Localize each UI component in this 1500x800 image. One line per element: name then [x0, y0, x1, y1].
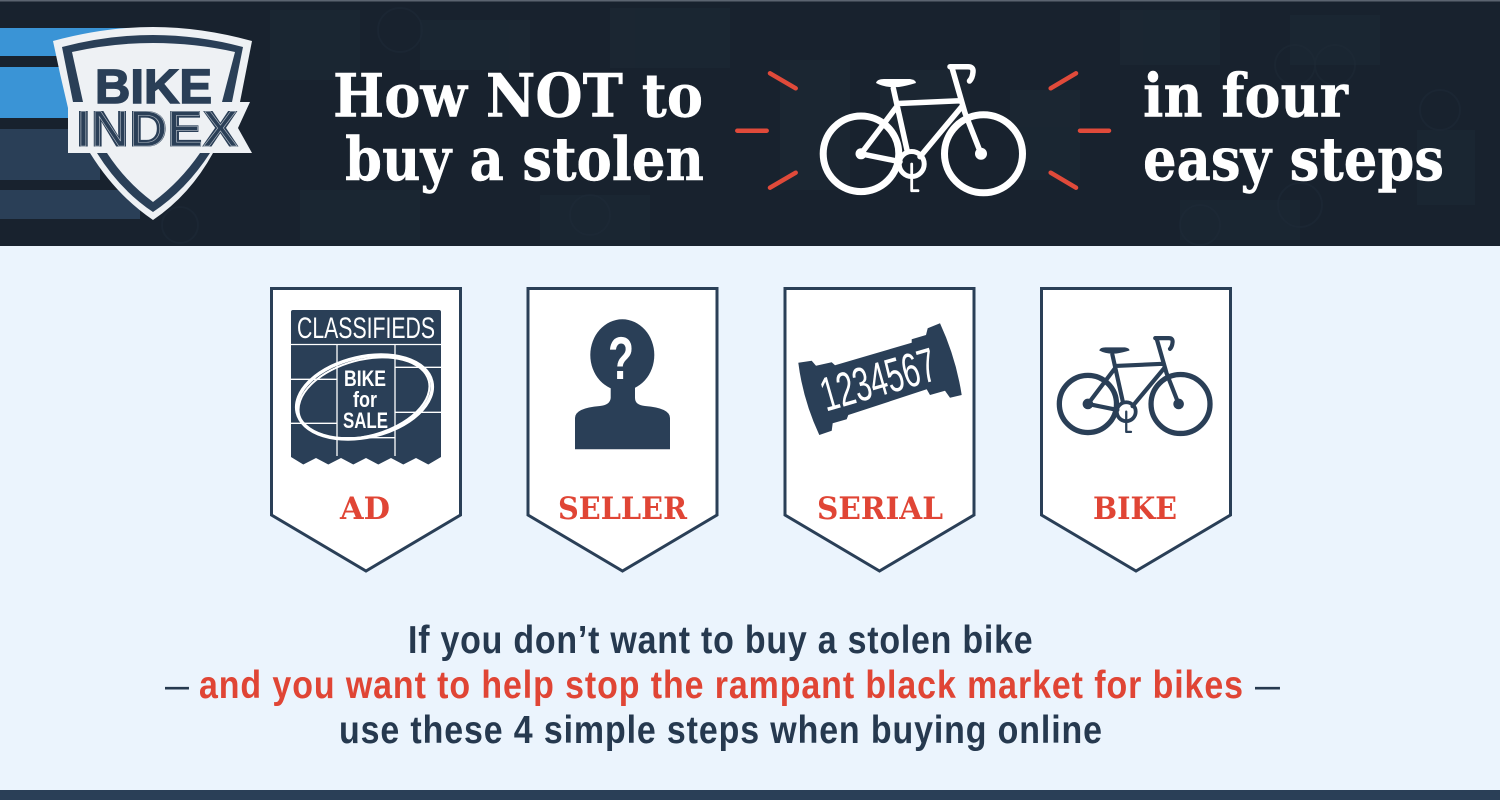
label: SELLER: SELLER [558, 491, 687, 527]
text block: call to action [165, 618, 1280, 752]
title left: buy a stolen [345, 125, 704, 195]
panel: serial [785, 288, 974, 571]
header band [0, 0, 1500, 246]
label: AD: AD [339, 491, 390, 527]
panel: seller [528, 288, 717, 571]
logo word BIKE: BIKE [95, 61, 212, 114]
panel: ad [272, 288, 460, 571]
logo word INDEX: INDEX [76, 101, 238, 157]
icon: classifieds newspaper: SALE [343, 408, 388, 433]
panel: bike [1042, 288, 1230, 571]
logo: Bike Index shield [53, 27, 252, 220]
logo word INDEX: INDEX [76, 101, 238, 157]
text block: call to action: If you don’t want to buy a stolen bike [408, 618, 1033, 662]
text block: call to action: – [165, 664, 189, 707]
title left [333, 62, 704, 195]
title left: How NOT to [333, 62, 703, 132]
icon: navy bicycle [1059, 338, 1210, 433]
label: SERIAL: SERIAL [817, 491, 943, 527]
text block: call to action: and you want to help stop the rampant black market for bikes [199, 663, 1243, 707]
icon: classifieds newspaper: CLASSIFIEDS [297, 312, 435, 345]
title right: in four [1143, 62, 1349, 132]
text block: call to action: – [1255, 664, 1280, 707]
title right: easy steps [1143, 125, 1444, 195]
blue and navy stripes [0, 28, 140, 219]
icon: unknown seller silhouette: ? [608, 325, 634, 392]
icon: bottom bracket serial number: 1234567 [814, 339, 942, 422]
footer bar [0, 790, 1500, 800]
icon: classifieds newspaper [288, 310, 441, 464]
icon: classifieds newspaper: for [353, 387, 377, 412]
icon: white bicycle with red rays [737, 67, 1109, 193]
icon: unknown seller silhouette [575, 319, 670, 449]
icon: bottom bracket serial number [798, 323, 962, 435]
label: BIKE: BIKE [1093, 491, 1177, 527]
title right [1143, 62, 1444, 195]
icon: classifieds newspaper: BIKE [344, 366, 386, 391]
text block: call to action: use these 4 simple steps when buying online [339, 708, 1102, 752]
